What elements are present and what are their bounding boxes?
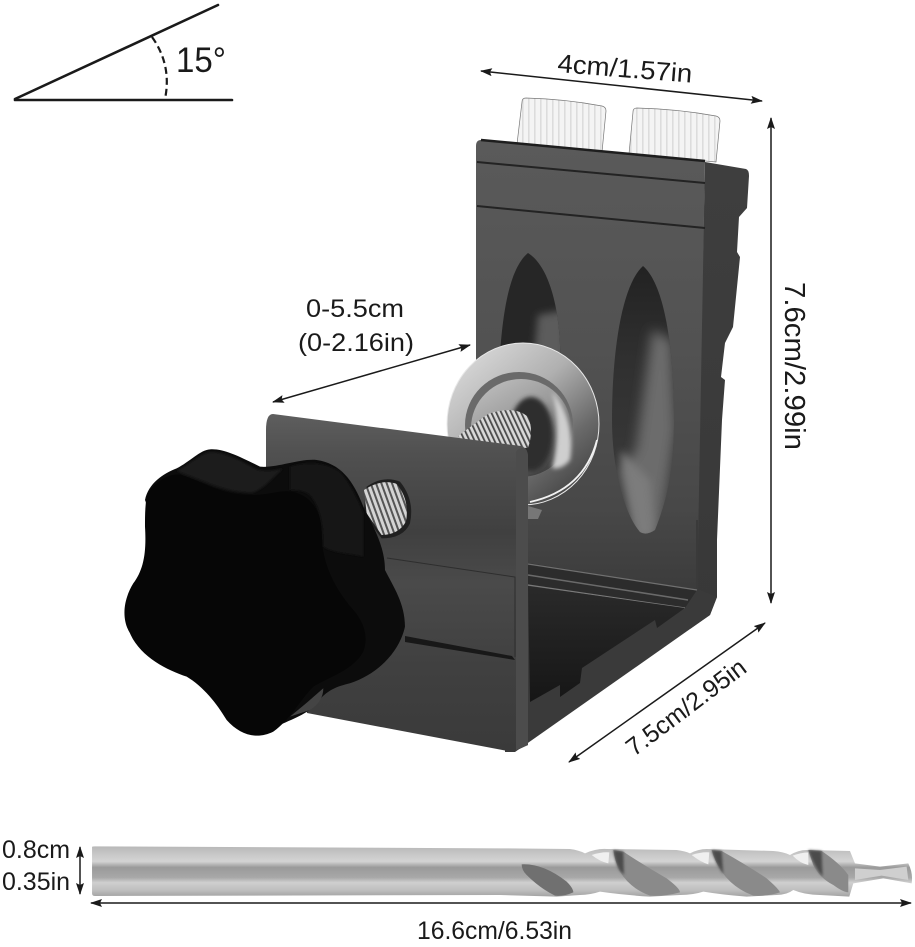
drill body	[92, 846, 912, 897]
thumb screw left	[517, 98, 606, 152]
dimension: bit diameter: 0.35in	[2, 868, 70, 896]
dimension: bit diameter: 0.8cm	[2, 836, 70, 864]
knob bolt stub and knob	[124, 449, 411, 736]
drill flat tip band	[855, 867, 908, 880]
knob face	[124, 475, 366, 736]
thumb screw right	[629, 108, 720, 162]
bolt stub	[363, 479, 411, 538]
dimension: width 4cm: 4cm/1.57in	[557, 48, 693, 89]
dimension: clamp range 0-5.5cm: 0-5.5cm	[306, 295, 404, 323]
dimension: depth 7.5cm	[569, 623, 765, 762]
dimension: width 4cm	[481, 48, 762, 101]
dimension: bit diameter	[2, 836, 80, 896]
base ledge	[505, 590, 717, 752]
product: pocket hole jig	[124, 98, 749, 752]
front clamp plate	[266, 414, 528, 752]
knob highlight lower	[290, 688, 323, 717]
dimension: clamp range 0-5.5cm: (0-2.16in)	[298, 329, 414, 357]
interior floor	[528, 586, 685, 702]
drill bit	[92, 846, 912, 897]
knob body	[145, 449, 405, 727]
dimension: height 7.6cm: 7.6cm/2.99in	[778, 282, 810, 450]
pocket slot right	[612, 266, 676, 538]
threaded bolt	[458, 410, 531, 448]
dimension: bit length: 16.6cm/6.53in	[417, 917, 572, 945]
washer	[447, 343, 599, 519]
drill flute shadows	[613, 850, 823, 877]
drill flutes	[522, 850, 848, 896]
guide rail	[528, 563, 697, 608]
knob highlight right	[290, 463, 363, 557]
pocket slot left	[500, 253, 560, 352]
angle label: 15°	[176, 41, 226, 80]
dimension: clamp range 0-5.5cm	[273, 295, 470, 402]
dimension: depth 7.5cm: 7.5cm/2.95in	[621, 653, 752, 762]
knob highlight top	[177, 452, 283, 493]
icon: 15 degree angle diagram	[15, 5, 232, 100]
jig side face	[690, 162, 749, 629]
jig back plate	[476, 140, 705, 600]
drill highlights	[592, 852, 808, 865]
